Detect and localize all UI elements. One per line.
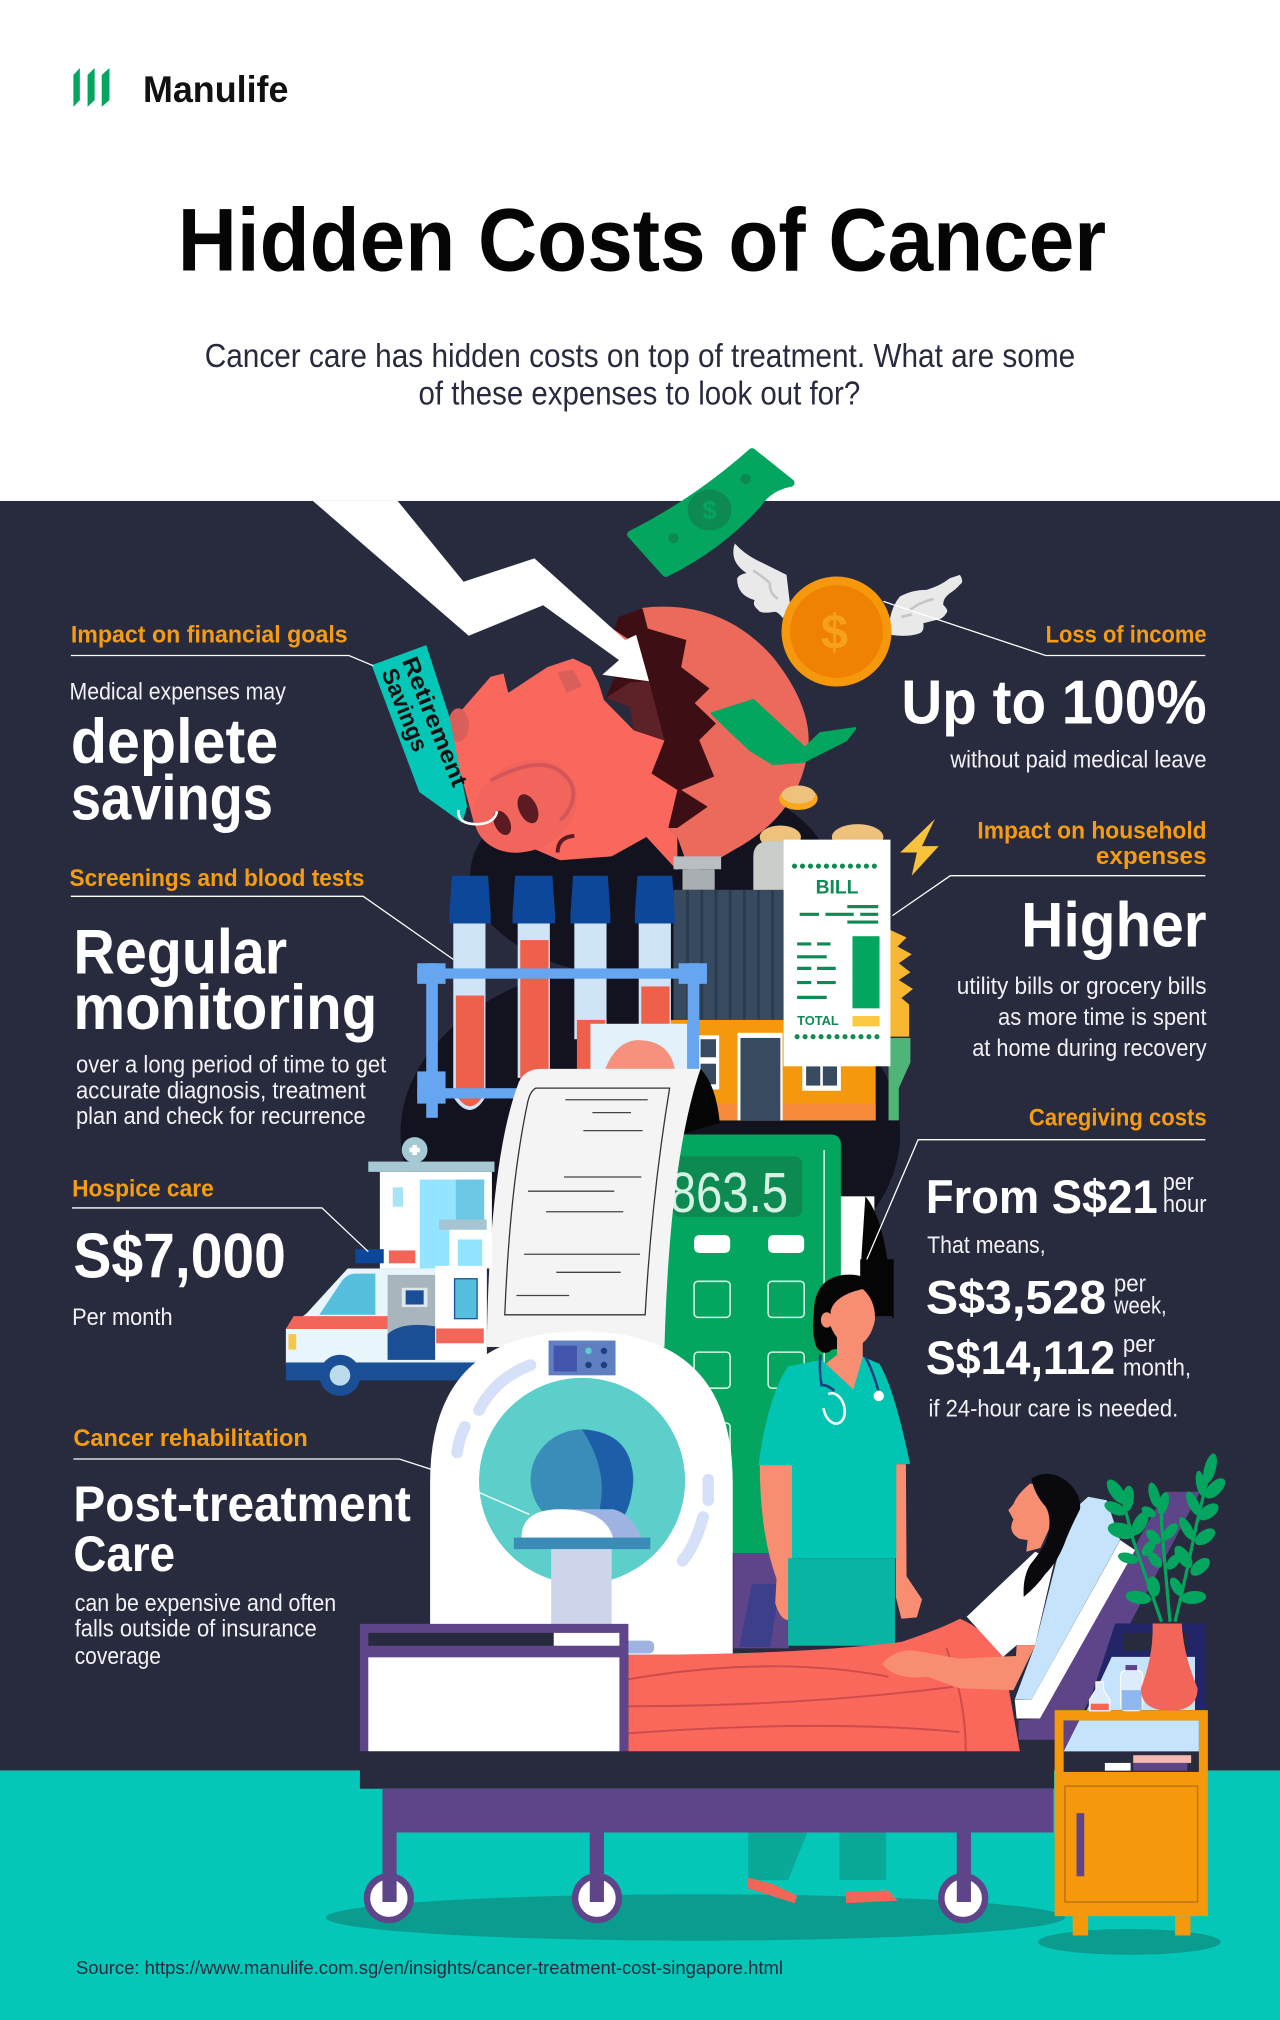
- panel: screenings and blood tests: Regular: [73, 918, 287, 988]
- panel: cancer rehabilitation: Cancer rehabilitation: [73, 1425, 308, 1452]
- illustration: ambulance: [286, 1249, 487, 1396]
- icon: lightning bolt: [900, 819, 939, 876]
- icon: coins: [760, 786, 883, 850]
- logo: Manulife: Manulife: [143, 68, 288, 110]
- illustration: nurse: [733, 1259, 922, 1903]
- panel: caregiving costs: if 24-hour care is needed.: [928, 1396, 1178, 1423]
- panel: impact on household expenses: at home during recovery: [972, 1035, 1207, 1062]
- panel: caregiving costs: month,: [1123, 1354, 1191, 1381]
- illustration: bed base and wheels: [367, 1789, 1053, 1920]
- panel: caregiving costs: That means,: [927, 1232, 1046, 1259]
- icon: medicine bottles: [1089, 1665, 1143, 1711]
- panel: cancer rehabilitation: falls outside of insurance: [75, 1616, 317, 1643]
- panel: screenings and blood tests: Screenings and blood tests: [70, 865, 364, 892]
- panel: caregiving costs: Caregiving costs: [1029, 1105, 1207, 1132]
- panel: caregiving costs: S$14,112: [926, 1332, 1115, 1385]
- icon: right paper behind calculator: [824, 1196, 892, 1316]
- panel: impact on financial goals: deplete: [71, 707, 278, 777]
- panel: loss of income: without paid medical leave: [949, 747, 1207, 774]
- panel: impact on household expenses: Higher: [1021, 891, 1207, 961]
- icon: banknote in piggy: [712, 700, 855, 764]
- illustration: house: [670, 856, 876, 1120]
- panel: screenings and blood tests: monitoring: [73, 973, 377, 1043]
- panel: impact on household expenses: utility bills or grocery bills: [957, 973, 1207, 1000]
- subtitle: [205, 338, 1075, 412]
- panel: impact on financial goals: savings: [71, 764, 273, 834]
- illustration: test tubes rack: [417, 876, 707, 1118]
- icon: falling banknote: [631, 452, 791, 573]
- illustration: utility bill: [753, 840, 890, 1066]
- subtitle: of these expenses to look out for?: [419, 375, 860, 412]
- icon: falling banknote: $: [702, 497, 717, 525]
- tag: Retirement Savings: Retirement: [397, 653, 473, 791]
- panel: screenings and blood tests: [70, 865, 386, 1130]
- illustration: patient: [882, 1474, 1080, 1690]
- callout leader lines: [71, 601, 1205, 1514]
- illustration: broken piggy bank: [447, 607, 883, 873]
- panel: impact on household expenses: as more time is spent: [998, 1004, 1207, 1031]
- illustration: hospital: [368, 1137, 494, 1268]
- dark backdrop blob: [400, 773, 900, 1307]
- panel: cancer rehabilitation: Post-treatment: [73, 1476, 411, 1532]
- arrow: white falling trend: [313, 501, 649, 681]
- panel: screenings and blood tests: plan and check for recurrence: [76, 1103, 366, 1130]
- panel: impact on household expenses: Impact on household: [977, 817, 1207, 844]
- panel: hospice care: Per month: [72, 1304, 173, 1331]
- panel: screenings and blood tests: over a long period of time to get: [76, 1052, 386, 1079]
- illustration: scan photo: [590, 1024, 687, 1075]
- illustration: shadows on floor: [326, 1894, 1221, 1955]
- panel: caregiving costs: hour: [1163, 1191, 1207, 1218]
- illustration: MRI scanner: [430, 1332, 733, 1655]
- panel: hospice care: [72, 1175, 286, 1331]
- panel: cancer rehabilitation: Care: [73, 1526, 175, 1582]
- panel: loss of income: Up to 100%: [901, 669, 1207, 738]
- illustration: calculator: [663, 1135, 841, 1553]
- panel: cancer rehabilitation: coverage: [75, 1643, 161, 1670]
- panel: caregiving costs: per: [1163, 1169, 1194, 1196]
- illustration: bedside table: [1055, 1710, 1208, 1935]
- illustration: receipt: [487, 1069, 720, 1347]
- icon: flying coin: $: [821, 606, 848, 660]
- panel: screenings and blood tests: accurate diagnosis, treatment: [76, 1077, 366, 1104]
- panel: caregiving costs: week,: [1113, 1293, 1167, 1320]
- panel: caregiving costs: [926, 1105, 1207, 1423]
- illustration: bed backrest: [1015, 1492, 1205, 1740]
- tag: Retirement Savings: [372, 645, 497, 824]
- panel: loss of income: Loss of income: [1046, 622, 1207, 649]
- subtitle: Cancer care has hidden costs on top of treatment. What are some: [205, 338, 1075, 375]
- panel: cancer rehabilitation: [73, 1425, 411, 1670]
- illustration: utility bill: BILL: [816, 878, 859, 899]
- panel: cancer rehabilitation: can be expensive and often: [75, 1590, 336, 1617]
- panel: hospice care: S$7,000: [73, 1221, 286, 1291]
- panel: caregiving costs: per: [1114, 1271, 1146, 1298]
- illustration: utility bill: TOTAL: [797, 1013, 839, 1028]
- source note: Source: https://www.manulife.com.sg/en/insights/cancer-treatment-cost-singapore.html: [76, 1958, 783, 1978]
- logo: Manulife: [73, 68, 288, 110]
- panel: impact on financial goals: Medical expenses may: [70, 678, 287, 705]
- icon: energy saving bulb: [889, 930, 913, 1120]
- illustration: calculator: 863.5: [670, 1162, 788, 1225]
- panel: impact on financial goals: Impact on financial goals: [71, 622, 348, 649]
- panel: caregiving costs: per: [1123, 1331, 1155, 1358]
- icon: plant in vase: [1102, 1452, 1229, 1711]
- panel: impact on household expenses: expenses: [1096, 843, 1207, 870]
- panel: caregiving costs: S$3,528: [926, 1272, 1106, 1325]
- illustration: bed and blanket: [360, 1619, 1054, 1789]
- panel: caregiving costs: From S$21: [926, 1171, 1158, 1224]
- panel: impact on household expenses: [957, 817, 1207, 1062]
- title: Hidden Costs of Cancer: [178, 190, 1106, 289]
- tag: Retirement Savings: Savings: [377, 664, 433, 755]
- icon: flying coin: [733, 543, 962, 687]
- panel: hospice care: Hospice care: [72, 1175, 214, 1202]
- panel: loss of income: [901, 622, 1207, 774]
- panel: impact on financial goals: [70, 622, 348, 834]
